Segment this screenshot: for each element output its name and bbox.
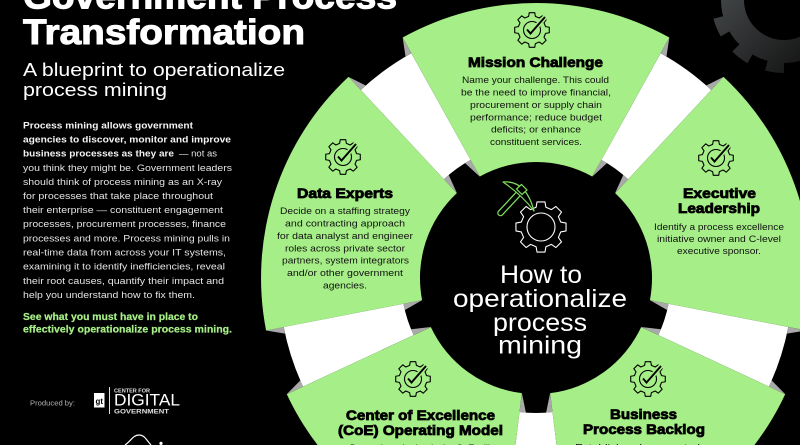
call to action bbox=[23, 312, 232, 336]
body: Name your challenge. This could bbox=[462, 75, 609, 86]
body: agencies. bbox=[323, 280, 367, 291]
body: executive sponsor. bbox=[677, 246, 761, 257]
body: performance; reduce budget bbox=[470, 112, 602, 123]
subtitle: A blueprint to operationalize bbox=[23, 60, 285, 80]
icon: gear check bbox=[326, 140, 360, 174]
panel: Data Experts bbox=[233, 66, 481, 373]
call to action: See what you must have in place to bbox=[23, 312, 198, 323]
heading: Leadership bbox=[678, 200, 760, 216]
intro text block: you think they might be. Government leaders bbox=[23, 163, 232, 174]
intro text block: business processes as they are bbox=[23, 149, 174, 160]
panel: Business Process Backlog bbox=[488, 282, 800, 445]
produced by logo: CENTER FOR bbox=[114, 388, 150, 394]
intro text block bbox=[23, 120, 232, 301]
produced by logo: GOVERNMENT bbox=[114, 410, 169, 416]
intro text block: their root causes, quantify their impact and bbox=[23, 276, 224, 287]
intro text block: help you understand how to fix them. bbox=[23, 290, 195, 301]
decorative gear top right bbox=[716, 0, 800, 68]
body: be the need to improve financial, bbox=[461, 88, 611, 98]
body: and/or other government bbox=[287, 268, 403, 279]
intro text block: examining it to identify inefficiencies, reveal bbox=[23, 262, 225, 273]
white connector bands bbox=[282, 52, 790, 445]
heading bbox=[338, 407, 503, 438]
body: Identify a process excellence bbox=[654, 222, 784, 233]
heading: Business bbox=[610, 406, 677, 422]
body: deficits; or enhance bbox=[491, 125, 581, 136]
icon: gear check bbox=[699, 141, 733, 175]
body bbox=[461, 75, 611, 148]
heading: Mission Challenge bbox=[468, 54, 603, 70]
body: constituent services. bbox=[490, 137, 582, 148]
intro text block: processes and more. Process mining pulls in bbox=[23, 234, 230, 244]
body: Decide on a staffing strategy bbox=[280, 206, 410, 217]
intro text block: their enterprise — constituent engagement bbox=[23, 205, 223, 216]
panel: Mission Challenge bbox=[403, 3, 669, 176]
icon: gear check bbox=[396, 362, 430, 396]
intro text block: agencies to discover, monitor and improve bbox=[23, 135, 231, 146]
call to action: effectively operationalize process mining. bbox=[23, 324, 232, 336]
subtitle bbox=[23, 60, 285, 100]
panel: Executive Leadership bbox=[591, 66, 800, 373]
body: for data analyst and engineer bbox=[277, 231, 414, 242]
icon: pickaxe and gear bbox=[500, 182, 566, 252]
intro text block: real-time data from across your IT systems, bbox=[23, 248, 226, 259]
body bbox=[654, 222, 784, 257]
title: Transformation bbox=[23, 13, 305, 52]
produced by logo: gt bbox=[96, 397, 103, 406]
heading: Center of Excellence bbox=[346, 407, 495, 423]
heading: Process Backlog bbox=[583, 421, 705, 437]
heading: (CoE) Operating Model bbox=[338, 422, 503, 438]
body: and contracting approach bbox=[285, 218, 405, 230]
icon: gear check bbox=[631, 362, 665, 396]
subtitle: process mining bbox=[23, 80, 167, 100]
sponsor logo, cropped bbox=[125, 435, 163, 445]
intro text block: processes, procurement processes, finance bbox=[23, 219, 226, 230]
heading bbox=[678, 185, 760, 216]
intro text block: — not as bbox=[179, 149, 217, 160]
icon: gear check bbox=[515, 13, 549, 47]
body: partners, system integrators bbox=[282, 256, 409, 267]
produced by logo: DIGITAL bbox=[114, 392, 180, 410]
center title bbox=[453, 261, 627, 360]
center title: How to bbox=[500, 261, 582, 289]
title bbox=[23, 0, 397, 52]
produced by logo bbox=[30, 387, 180, 416]
body: initiative owner and C-level bbox=[657, 234, 781, 245]
intro text block: Process mining allows government bbox=[23, 120, 194, 132]
produced by logo: Produced by: bbox=[30, 398, 75, 408]
body: roles across private sector bbox=[285, 243, 406, 254]
panel: Center of Excellence bbox=[267, 282, 584, 445]
intro text block: should think of process mining as an X-ray bbox=[23, 177, 222, 188]
connector shadows bbox=[266, 37, 800, 445]
body: procurement or supply chain bbox=[470, 100, 602, 111]
center title: mining bbox=[498, 332, 582, 360]
heading: Data Experts bbox=[297, 185, 393, 201]
body bbox=[277, 206, 414, 291]
center title: operationalize bbox=[453, 285, 627, 313]
center title: process bbox=[493, 309, 587, 337]
heading: Executive bbox=[683, 185, 756, 201]
heading bbox=[583, 406, 705, 437]
intro text block: for processes that take place throughout bbox=[23, 191, 213, 202]
